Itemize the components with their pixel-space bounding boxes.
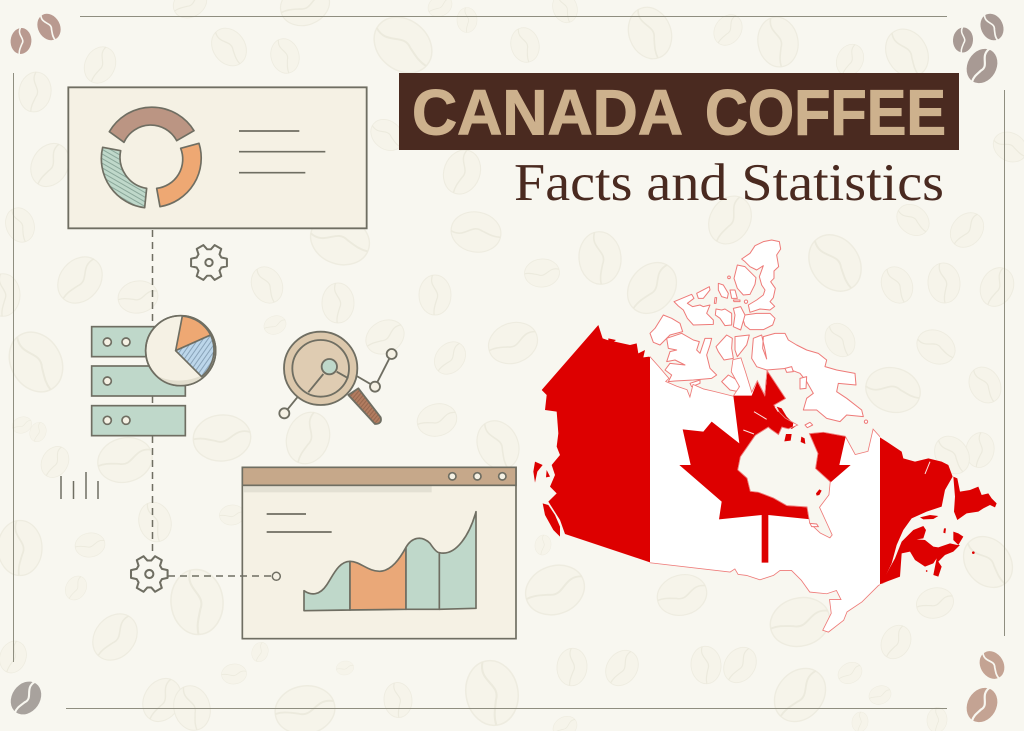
- title bar: [242, 467, 516, 485]
- decorative bar glyph: [61, 472, 98, 499]
- icon: server stack with pie chart: [92, 316, 216, 436]
- mainland outline: [650, 356, 880, 633]
- dashed connector, vertical: [152, 230, 154, 556]
- icon: gear top: [191, 245, 227, 280]
- Akimiski island outline: [810, 523, 818, 527]
- panel: browser window with area chart: [242, 467, 516, 639]
- title banner: [399, 73, 959, 150]
- title banner: COFFEE: [705, 76, 946, 148]
- icon: connector end dot: [272, 572, 280, 580]
- corner beans: top left: [9, 9, 65, 55]
- corner bean: bottom left: [4, 675, 48, 721]
- arctic islands: [650, 240, 868, 429]
- title banner: CANADA: [412, 76, 683, 148]
- donut chart: [101, 107, 201, 208]
- corner beans: bottom right: [960, 646, 1010, 728]
- area chart: [304, 512, 476, 611]
- icon: magnifying glass with network: [279, 332, 397, 424]
- subtitle: Facts and Statistics: [514, 154, 944, 212]
- maple leaf: [679, 372, 851, 563]
- map: Canada flag silhouette: [530, 240, 997, 637]
- pie chart: [146, 316, 216, 386]
- panel: donut chart card: [68, 87, 367, 228]
- red islands and maritimes: [533, 338, 997, 584]
- dashed connector, horizontal: [168, 575, 272, 577]
- icon: gear bottom: [131, 556, 168, 592]
- corner beans: top right: [952, 9, 1008, 89]
- legend lines: [239, 131, 325, 173]
- mainland with flag: [542, 325, 953, 632]
